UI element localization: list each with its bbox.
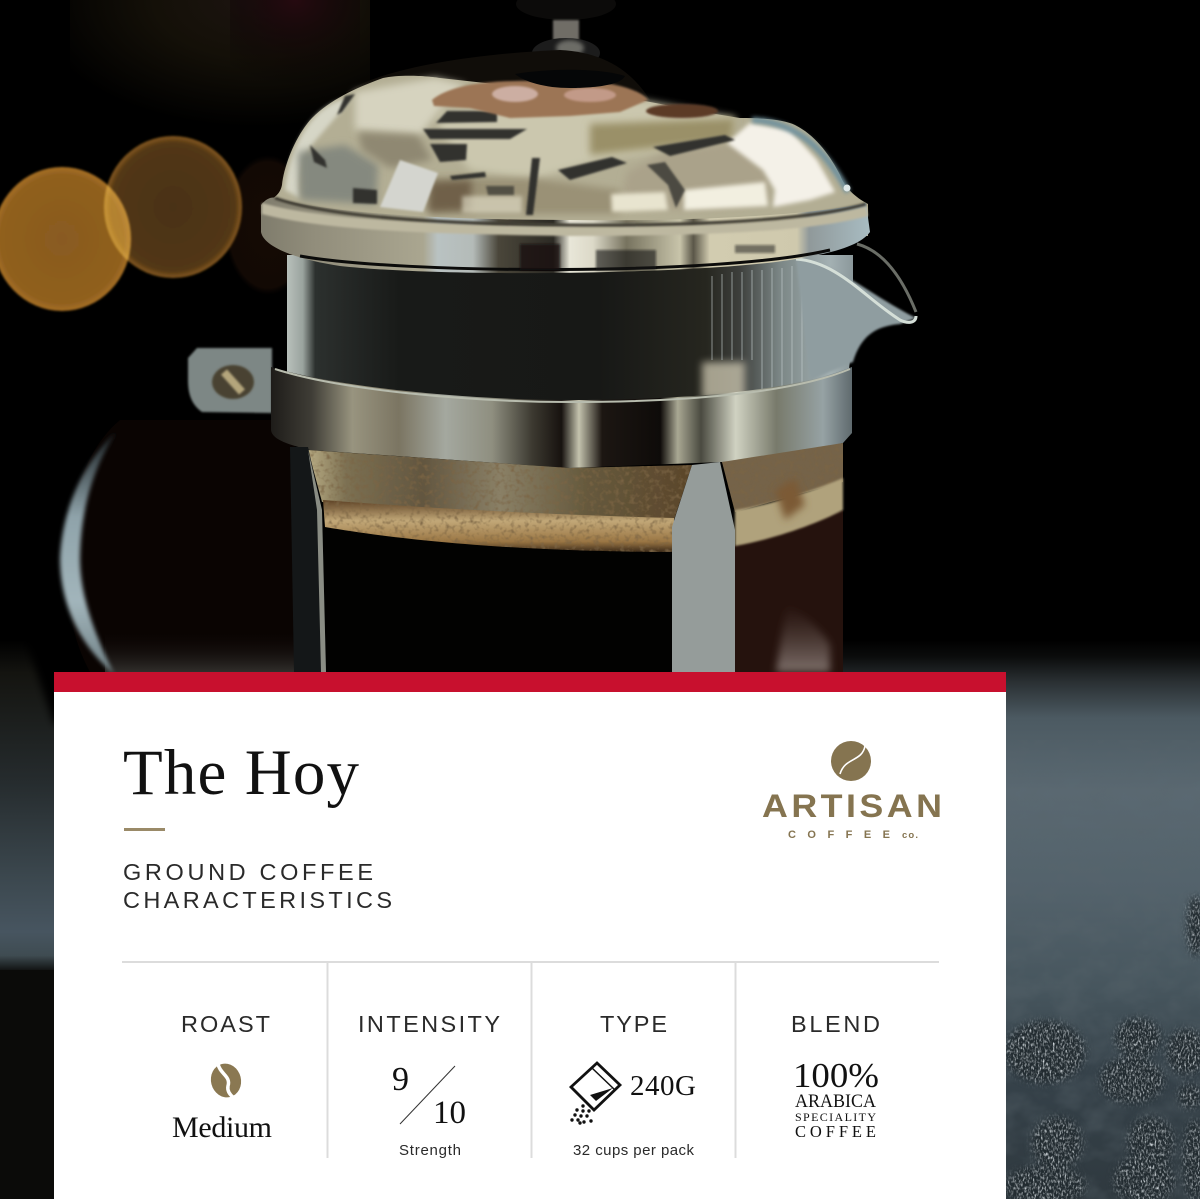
spout bbox=[796, 258, 916, 380]
title underline bbox=[124, 828, 165, 831]
metal strip bbox=[672, 462, 735, 672]
panel: product card bbox=[54, 672, 1006, 1199]
hand reflection bbox=[432, 81, 648, 118]
table left side bbox=[0, 640, 56, 972]
reflection small brown oval bbox=[646, 104, 718, 118]
type heading: TYPE bbox=[600, 1011, 667, 1037]
dark warm interior of handle bbox=[66, 420, 295, 672]
column: intensity bbox=[358, 1011, 500, 1159]
logo: Artisan Coffee Co. bbox=[762, 741, 942, 841]
column: blend bbox=[791, 1011, 880, 1141]
dome left bright bbox=[285, 99, 350, 198]
title: The Hoy bbox=[123, 737, 360, 809]
table right side bbox=[840, 640, 1200, 1199]
dome dark top bbox=[345, 50, 650, 110]
dome lower centre panel bbox=[430, 178, 620, 214]
logo tagline: co. bbox=[902, 830, 918, 841]
wire handle behind spout bbox=[857, 244, 916, 312]
blend heading: BLEND bbox=[791, 1011, 880, 1037]
lid rim bbox=[261, 197, 870, 273]
dome lid bbox=[266, 70, 868, 236]
bokeh light faint bbox=[224, 155, 312, 295]
glass ribs bbox=[712, 266, 802, 392]
subtitle bbox=[123, 859, 392, 913]
glass above foam right bbox=[722, 443, 843, 512]
coffee reflection bbox=[776, 605, 830, 672]
intensity denominator: 10 bbox=[433, 1095, 466, 1131]
blend value: ARABICA bbox=[795, 1092, 877, 1112]
dome brown patch bbox=[428, 180, 472, 212]
glass bright reflection bbox=[702, 362, 745, 400]
column: type bbox=[570, 1011, 696, 1159]
dome olive panel bbox=[358, 132, 432, 168]
card white body bbox=[54, 672, 1006, 1199]
bokeh light left bbox=[0, 167, 131, 311]
dome lower right panel bbox=[620, 142, 770, 210]
knob bbox=[516, 0, 616, 68]
foam left bbox=[323, 500, 674, 552]
logo tagline: COFFEE bbox=[788, 829, 890, 841]
icon: coffee bean bbox=[207, 1060, 245, 1101]
blend value: COFFEE bbox=[795, 1122, 876, 1141]
dim backdrop top bbox=[70, 0, 370, 170]
metal band bbox=[271, 367, 852, 468]
dome upper left bright bbox=[355, 78, 465, 135]
foam right bbox=[735, 478, 843, 546]
disc under knob bbox=[515, 70, 625, 88]
dome left grey panel bbox=[298, 145, 378, 204]
dome sparkle bbox=[844, 184, 850, 192]
dome olive gold band bbox=[590, 118, 735, 155]
coffee left bbox=[322, 525, 675, 672]
white square reflection bbox=[380, 160, 438, 212]
handle bracket and screw bbox=[188, 348, 272, 413]
blend value: 100% bbox=[793, 1056, 879, 1095]
table left dark foreground bbox=[0, 970, 56, 1199]
subtitle: CHARACTERISTICS bbox=[123, 887, 392, 913]
glass above foam left bbox=[308, 450, 692, 520]
dome bright low patches bbox=[462, 182, 768, 213]
metal strap left bbox=[290, 447, 326, 672]
logo wordmark: ARTISAN bbox=[762, 789, 942, 825]
type caption: 32 cups per pack bbox=[573, 1142, 694, 1159]
table back fade bbox=[105, 630, 295, 674]
roast value: Medium bbox=[172, 1111, 272, 1144]
glass body bbox=[287, 255, 853, 410]
intensity numerator: 9 bbox=[392, 1061, 409, 1098]
dome reflections bbox=[310, 94, 735, 215]
coffee right bbox=[735, 510, 843, 672]
table left handle shadow bbox=[16, 610, 70, 724]
red top band bbox=[54, 672, 1006, 692]
blend value bbox=[793, 1056, 879, 1141]
table knit texture bbox=[1000, 890, 1200, 1199]
intensity caption: Strength bbox=[399, 1142, 461, 1159]
intensity slash bbox=[400, 1066, 455, 1124]
strap highlight bbox=[308, 450, 326, 672]
nail reflections bbox=[492, 86, 538, 102]
dome bright highlight right bbox=[727, 123, 835, 207]
roast heading: ROAST bbox=[181, 1011, 270, 1037]
bokeh light right bbox=[104, 136, 242, 278]
dome centre band bbox=[440, 100, 735, 180]
logo bean icon bbox=[831, 741, 871, 781]
blend value: SPECIALITY bbox=[795, 1110, 876, 1124]
foam stain bbox=[775, 478, 805, 520]
table dividers bbox=[122, 961, 939, 1158]
column: roast bbox=[172, 1011, 272, 1144]
table cloudy shading bbox=[1006, 740, 1200, 1199]
press handle crescent highlight bbox=[60, 432, 116, 674]
type weight: 240G bbox=[630, 1070, 696, 1102]
dark red backdrop tint bbox=[230, 0, 360, 110]
icon: coffee pack pouring bbox=[570, 1063, 620, 1125]
intensity heading: INTENSITY bbox=[358, 1011, 500, 1037]
subtitle: GROUND COFFEE bbox=[123, 859, 373, 885]
dome blue edge bbox=[752, 120, 848, 192]
